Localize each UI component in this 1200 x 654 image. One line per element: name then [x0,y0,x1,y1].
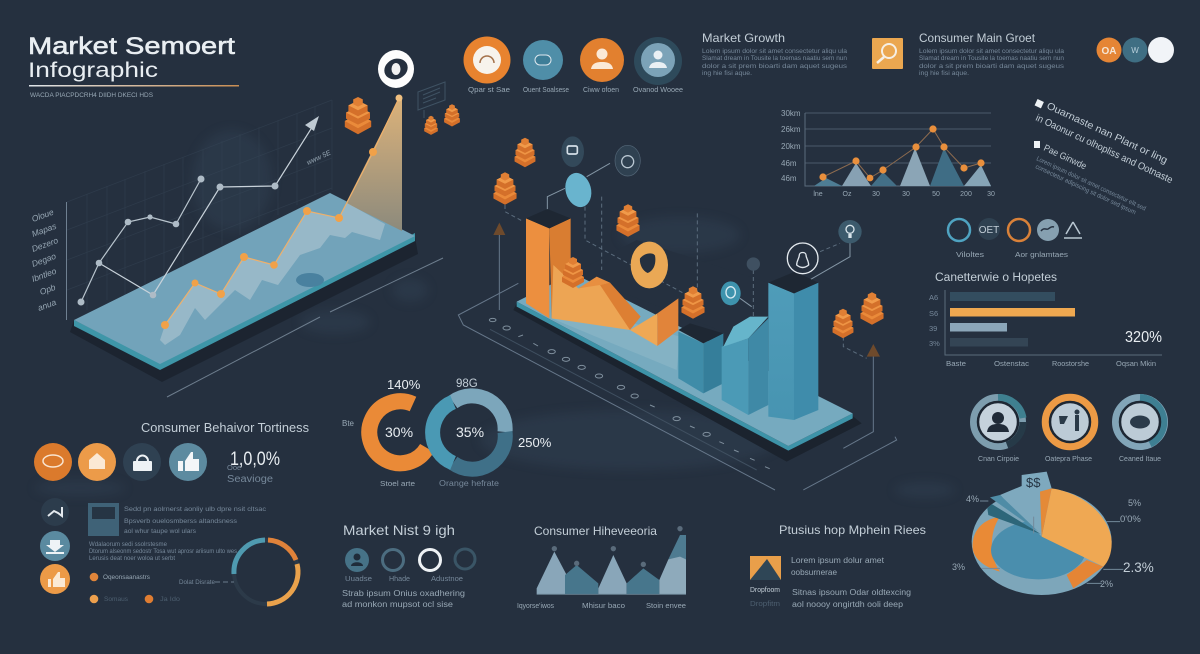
x labels: 30 [872,191,880,198]
y labels: 30km [781,109,801,118]
heading: Market Nist 9 igh [343,522,455,538]
y axis labels: anua [36,297,58,313]
body copy: dolor a sit prem bioarti dam aquet sugeus [702,63,848,70]
wedge dark [987,504,1041,534]
icon: bulb [838,220,862,243]
panel: left lower list: Ja Ido [160,597,181,603]
y labels: 3% [929,339,940,348]
icon: thumbs up [169,443,207,481]
white line one [81,179,201,302]
y axis labels: Opb [38,282,57,297]
blue donut [433,396,505,469]
icon labels: Ouent Soalsese [523,85,569,94]
orange slice [1040,488,1052,537]
peaks [537,526,686,594]
icon: download [40,531,70,561]
x labels: 30 [987,191,995,198]
text lines: Bpsverb ouelosmberss altandsness [124,518,238,525]
axes [945,290,1162,355]
y axis [66,202,68,320]
icon: at sign [615,145,640,176]
x labels: Ostenstac [994,359,1029,368]
icon: blue disc [562,170,595,210]
panel: market nist [342,522,475,609]
text: aol noooy ongirtdh ooli deep [792,600,904,609]
panel: donut pair: 140% [387,377,421,392]
ring captions: Oatepra Phase [1045,454,1092,463]
ring labels [345,576,463,583]
heading: Market Growth [702,31,785,45]
panel: isometric line chart [30,94,443,397]
panel: ring icons: Aor gnlamtaes [1015,250,1068,259]
icon: person ring [787,243,818,274]
text: oobsurnerae [791,568,838,577]
text: Dropfitm [750,601,780,608]
icon: orange person [580,38,624,82]
panel: central isometric bar chart [458,163,897,490]
body copy: Lolem ipsum dolor sit amet consectetur aliqu ula [919,48,1064,55]
text lines: aol whur taupe wol ulars [124,528,197,535]
faint node [747,257,760,271]
x labels: lne [813,191,823,198]
body copy: ing hie fisi aque. [702,70,752,77]
wedge teal [990,495,1038,532]
arrow head [305,116,319,131]
icon: lock [123,443,161,481]
text: Sitnas ipsoum Odar oldtexcing [792,588,911,597]
panel: left lower list [40,498,298,604]
picture tile [750,556,781,580]
panel: pie chart: 4% [966,494,979,504]
orange donut [369,401,427,463]
panel: pie chart: 2% [1100,579,1113,589]
ring: cyan [948,219,970,241]
x labels: Baste [946,359,966,368]
donut values: 30% [385,424,413,440]
peak areas [814,148,991,186]
x labels: Oqsan Mkin [1116,359,1156,368]
arrow heads [493,223,880,357]
y labels [781,109,801,183]
x labels [946,359,1156,368]
platform edge [74,233,415,370]
icon: white ring [420,550,440,570]
ring captions: Ceaned Itaue [1119,454,1161,463]
body copy: Lolem ipsum dolor sit amet consectetur aliqu ula [702,48,847,55]
platform base [513,300,862,462]
platform top [517,273,853,446]
icon: eye [34,443,72,481]
chart labels: Mhisur baco [582,601,625,610]
blue bar medium [722,317,768,415]
value captions: Ooe [227,463,241,472]
panel: donut pair: 35% [456,424,484,440]
grid [805,113,991,186]
note body: Lorem ipsum dolor sit amet consectetur elit sed [1035,155,1147,213]
icon labels: Qpar st Sae [468,85,510,94]
pie labels: $$ [1026,475,1041,490]
text lines: Sedd pn aolrnerst aonliy ulb dpre nsit cltsac [124,506,267,513]
badge: OET [978,218,1000,240]
gold peak area [346,98,402,231]
ring labels: Adustnoe [431,576,463,583]
x labels: 50 [932,191,940,198]
panel: horizontal bar chart [929,272,1162,368]
ring label: Dolat Disrate [179,580,216,586]
panel: ring icons [948,218,1082,259]
value: 1,0,0% [230,449,280,470]
x labels: Roostorshe [1052,359,1089,368]
heading: Consumer Hiheveeoria [534,524,657,538]
icon: teal badge [523,40,563,80]
panel: pie chart: 5% [1128,498,1141,508]
orange lower slice [1067,560,1103,588]
y labels: A6 [929,293,938,302]
body copy [702,48,848,77]
wedge light [1000,472,1052,537]
floor frame lines [458,228,897,490]
y axis labels [30,207,60,313]
text lines: Wdalaorum sedi ssolrstesme [89,541,167,548]
icon: blue person [634,37,682,85]
data points [819,125,985,181]
leader lines [980,501,1123,583]
icon: gauge [464,36,510,84]
dashed connectors [505,197,867,358]
title rule [29,85,239,86]
heading: Consumer Main Groet [919,31,1036,45]
ring leader [215,581,234,583]
translucent area chart [160,203,385,345]
panel: consumer behaviour [34,420,309,485]
icon: bike [41,498,69,526]
panel: top icon row [464,36,683,94]
legend [90,573,98,581]
body copy: ad monkon mupsot ocl sise [342,600,454,609]
ring captions: Cnan Cirpoie [978,454,1019,463]
panel: donut pair: 98G [456,378,478,390]
heading: Canetterwie o Hopetes [935,272,1057,284]
panel: rotated note [1034,99,1175,216]
panel: donut pair: 250% [518,435,552,450]
title block [28,33,239,99]
outer base [972,488,1112,595]
y axis labels: Ibntleo [30,266,58,284]
floor line [167,258,443,397]
title: Market Semoert [28,33,235,60]
panel: pie chart [952,472,1154,595]
y labels: 46m [781,174,797,183]
heading: Consumer Behaivor Tortiness [141,420,309,435]
y labels: 39 [929,324,937,333]
panel: rotated note: Pae Ginwde [1042,143,1088,172]
bars [950,292,1055,301]
panel: consumer behaviour: Seavioge [227,474,273,485]
icon: server stacks [345,97,884,338]
icon: teal ring [382,550,404,570]
orange left band [973,517,1000,572]
y axis labels: Degao [30,251,57,269]
icons: top right badges: W [1131,46,1139,55]
dark back wedge [573,240,770,350]
body copy: Slamat dream in Tousite la toemas naatiu sem nun [702,55,847,62]
axis tick marks [489,318,770,469]
blue inner [991,521,1086,579]
ring: chat [1116,398,1164,446]
orange data line [165,98,399,325]
panel: pie chart: 0'0% [1120,514,1141,525]
panel: donut pair [342,377,552,488]
text [750,556,911,609]
ring: person [974,397,1023,446]
panel: donut pair: Bte [342,419,355,428]
heading: Ptusius hop Mphein Riees [779,523,926,537]
panel: donut pair: Orange hefrate [439,479,500,488]
panel: rotated note: consectetur adipiscing sit dolor sed ipsum [1034,163,1137,216]
body copy: Slamat dream in Tousite la toemas naatiu sem nun [919,55,1064,62]
captions: Viloltes [956,250,984,259]
note second line: in Oaonur cu olhopliss and Ootnaste [1034,113,1175,186]
white line points [78,176,278,306]
dark blob on platform [296,273,324,287]
icon: blue users [345,548,369,572]
orange tall bar [526,209,571,318]
chart labels: Iqyorse'iwos [517,601,554,610]
note heading [1035,99,1044,108]
y axis labels: Oloue [30,207,55,224]
y labels: S6 [929,309,938,318]
panel: pie chart: 2.3% [1123,560,1154,575]
body copy [342,589,465,609]
ring labels: Hhade [389,576,410,583]
icon: house [78,443,116,481]
white line two with arrow [99,121,316,295]
text lines: Lerusis deat noer woloa ut serbt [89,555,175,562]
body copy [919,48,1065,77]
panel: peaks line chart [781,109,995,198]
blue bar tall [768,272,818,420]
orange area folds [552,265,678,346]
text lines: Dtorum alseonm sedostr Tosa wut aprosr ariisum ulto wes [89,548,238,555]
x labels: Oz [843,191,852,198]
orange data points [161,94,402,329]
note sub heading [1034,141,1040,148]
platform top [74,193,415,364]
y labels: 46m [781,159,797,168]
chart labels [517,601,686,610]
platform edge [517,302,853,451]
x labels: 200 [960,191,972,198]
icon: note card [418,82,445,118]
x labels [813,191,995,198]
light orange sector [1042,488,1112,567]
body copy: dolor a sit prem bioarti dam aquet sugeus [919,63,1065,70]
ring: cart [1046,398,1094,446]
icons: top right badges: OA [1102,46,1116,57]
faint map blobs [35,130,955,498]
caption: WACDA PIACPDCRH4 DIIDH DKECI HDS [30,93,153,99]
panel: progress rings [974,397,1164,463]
ring chart [234,540,298,604]
text lines [89,506,267,562]
icon labels: Ciww ofoen [583,85,619,94]
panel: left lower list: Oqeonsaanastrs [103,575,150,581]
icon labels [468,85,683,94]
icon: dark chat [561,136,584,167]
ring labels: Uuadse [345,576,372,583]
icon: faint ring [455,549,475,569]
panel: rotated note: Ouarnaste nan Plant or ling [1045,101,1169,167]
icon labels: Ovanod Wooee [633,85,683,94]
platform base [70,237,418,382]
blue bar small [678,323,723,393]
icon: thumbs up orange [40,564,70,594]
text: Lorem ipsum dolur amet [791,556,885,565]
picture tile [88,503,119,536]
y axis labels: Mapas [30,221,58,239]
icon: orange shield disc [631,242,668,288]
panel: plusius text [750,523,926,609]
panel: pie chart: 3% [952,562,965,572]
small rotated label: www 5E [306,149,332,167]
value: 320% [1125,329,1162,346]
panel: market growth text [702,31,848,77]
icon: compass [1064,222,1082,238]
icon: teal oval [721,281,741,305]
light platform area [552,307,680,370]
x labels: 30 [902,191,910,198]
badge: wave [1037,219,1059,241]
y labels [929,293,940,348]
connector lines [547,163,850,307]
ring: orange [1008,219,1030,241]
panel: ring icons: OET [979,225,999,236]
body copy: ing hie fisi aque. [919,70,969,77]
connecting line [823,129,981,178]
panel: central floating icons [561,136,862,305]
donut captions: Stoel arte [380,479,415,488]
icons: top right badges [1096,37,1174,63]
icon: magnifier tile [872,38,903,69]
panel: consumer hierarchy chart [517,524,686,610]
panel: consumer main text [919,31,1065,77]
y labels: 20km [781,142,801,151]
y labels: 26km [781,125,801,134]
y axis labels: Dezero [30,235,60,254]
back wall grid [67,100,332,310]
icon: eye badge [378,50,414,88]
panel: left lower list: Somaus [104,597,128,603]
ring captions [978,454,1161,463]
chart labels: Stoin envee [646,601,686,610]
text: Dropfoom [750,587,780,594]
subtitle: Infographic [28,59,158,82]
body copy: Strab ipsum Onius oxadhering [342,589,465,598]
